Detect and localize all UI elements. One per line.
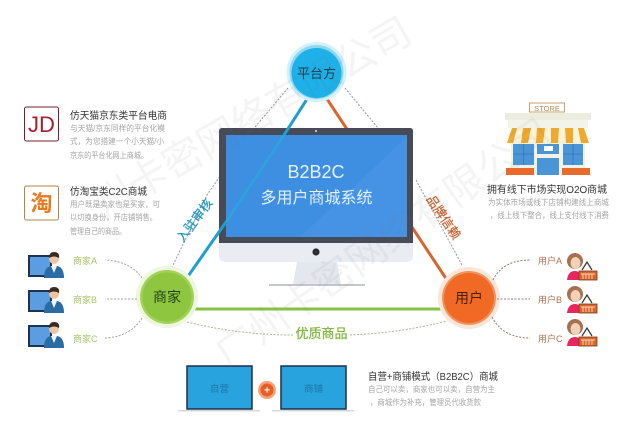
monitor chin <box>219 243 413 262</box>
icon: store <box>505 103 591 175</box>
user A <box>538 253 597 280</box>
text block: O2O: ，线上线下整合，线上支付线下消费 <box>490 210 609 220</box>
icon: Taobao <box>24 186 58 220</box>
monitor text: 多用户商城系统 <box>260 189 373 207</box>
merchant A <box>29 252 97 278</box>
icon: Taobao: 淘 <box>30 191 53 216</box>
icon: store: STORE <box>534 104 560 113</box>
blue line: platform to merchant <box>184 96 309 282</box>
text block: Taobao type: 以切换身份，开店铺销售。 <box>70 212 157 222</box>
laptop: self-operated <box>178 366 260 412</box>
text block: Tmall/JD type: 与天猫/京东同样的平台化模 <box>70 123 165 133</box>
text block: self-operated + shop: 自营+商铺模式（B2B2C）商城 <box>368 370 498 383</box>
node: merchant <box>136 266 198 328</box>
green line: merchant to user <box>188 308 446 310</box>
label: merchant review: 入驻审核 <box>173 195 216 245</box>
monitor <box>219 128 413 286</box>
text block: Taobao type <box>70 185 160 236</box>
node: user: 用户 <box>455 290 483 306</box>
monitor text: B2B2C <box>287 162 345 182</box>
watermark <box>86 10 560 376</box>
plus icon: + <box>264 386 270 396</box>
user B <box>538 286 597 313</box>
merchant C: 商家C <box>73 333 98 344</box>
text block: self-operated + shop <box>368 370 498 407</box>
watermark: 广州卡密网络有限公司 <box>207 111 560 376</box>
text block: Taobao type: 仿淘宝类C2C商城 <box>70 185 147 198</box>
label: brand trust: 品牌信赖 <box>424 192 464 243</box>
watermark: 州卡密网络有限公司 <box>86 10 419 228</box>
merchant B <box>29 287 97 313</box>
node: platform: 平台方 <box>297 66 336 81</box>
icon: JD: JD <box>28 112 55 137</box>
laptop: shop <box>272 366 354 412</box>
text block: self-operated + shop: 自己可以卖，商家也可以卖，自营为主 <box>368 384 495 394</box>
text block: Tmall/JD type: 京东的平台化网上商城。 <box>70 150 148 160</box>
plus icon <box>258 381 276 399</box>
user B: 用户B <box>538 294 562 305</box>
laptop: shop: 商铺 <box>304 383 323 395</box>
merchant branches <box>105 260 142 338</box>
node: user <box>438 267 500 329</box>
node: platform <box>286 42 346 102</box>
icon: JD <box>24 107 58 141</box>
dotted connector lines <box>172 88 462 335</box>
text block: self-operated + shop: ，商城作为补充，管理员代收货款 <box>370 397 481 407</box>
text block: Taobao type: 管理自己的商品。 <box>70 226 126 236</box>
text block: Tmall/JD type: 式，为您搭建一个小天猫/小 <box>70 136 164 146</box>
user A: 用户A <box>538 255 562 266</box>
user branches <box>492 260 530 338</box>
monitor text <box>260 162 373 207</box>
monitor screen <box>226 135 407 237</box>
text block: O2O: 为实体市场或线下店铺构建线上商城 <box>488 197 609 207</box>
text block: Taobao type: 用户既是卖家也是买家，可 <box>70 199 160 209</box>
monitor bezel <box>219 128 413 243</box>
merchant B: 商家B <box>73 294 97 305</box>
orange line: platform to user <box>325 96 447 280</box>
user C: 用户C <box>538 333 563 344</box>
label: quality goods: 优质商品 <box>295 326 348 341</box>
text block: Tmall/JD type <box>70 109 167 160</box>
laptop: self-operated: 自营 <box>210 383 229 395</box>
text block: O2O <box>487 183 609 220</box>
monitor stand <box>293 262 341 285</box>
merchant C <box>29 322 98 348</box>
text block: O2O: 拥有线下市场实现O2O商城 <box>487 183 607 196</box>
user C <box>538 319 597 346</box>
node: merchant: 商家 <box>153 289 181 305</box>
merchant A: 商家A <box>73 255 97 266</box>
text block: Tmall/JD type: 仿天猫京东类平台电商 <box>70 109 167 122</box>
